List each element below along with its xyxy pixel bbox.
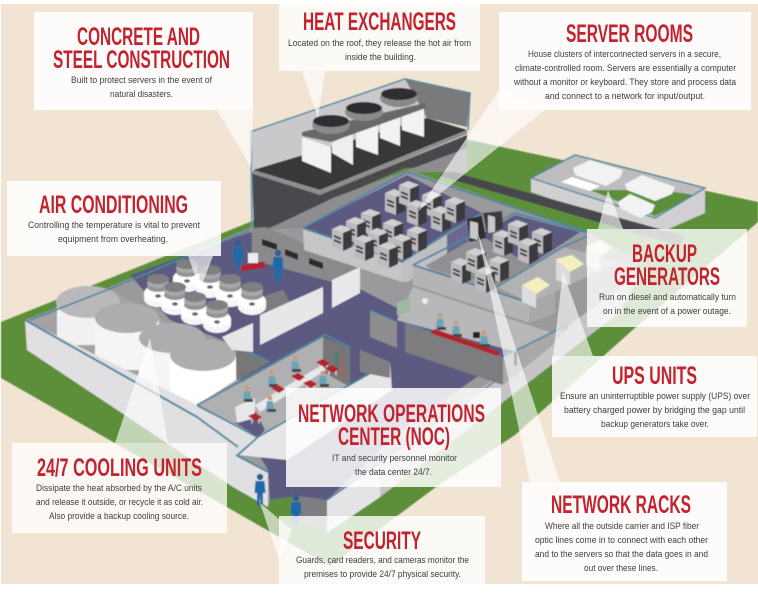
panel: network racks: and to the servers so that the data goes in and (535, 549, 708, 559)
panel: backup generators (587, 229, 747, 327)
exchanger legs (302, 137, 331, 173)
exchanger fans (312, 116, 350, 134)
panel: server rooms (499, 12, 751, 110)
main purple floor (130, 232, 515, 500)
panel: security: premises to provide 24/7 physical security. (304, 569, 461, 579)
panel: heat exchangers: inside the building. (345, 52, 416, 62)
heat exchanger tower (250, 79, 470, 230)
UPS room (497, 235, 620, 308)
panel: network racks: optic lines come in to connect with each other (535, 535, 708, 545)
panel: concrete and steel construction: natural disasters. (110, 89, 173, 99)
panel: network racks: out over these lines. (584, 563, 658, 573)
partition walls (260, 287, 323, 345)
network racks (467, 211, 503, 242)
panel: network operations center: CENTER (NOC) (338, 423, 450, 451)
central partition (370, 310, 397, 348)
exchanger stand (302, 103, 426, 142)
panel: heat exchangers (279, 4, 480, 71)
callout pointers (115, 71, 623, 560)
network operations center floor (397, 287, 567, 385)
panel: network operations center: NETWORK OPERATIONS (298, 400, 485, 428)
air conditioning units (144, 259, 266, 333)
panel: network operations center: the data center 24/7. (355, 467, 432, 477)
yard side wall (235, 345, 270, 381)
panel: heat exchangers: HEAT EXCHANGERS (303, 8, 456, 36)
panel: server rooms: climate-controlled room. Servers are essentially a computer (515, 63, 736, 73)
panel: server rooms: House clusters of interconnected servers in a secure, (528, 49, 721, 59)
panel: backup generators: Run on diesel and automatically turn (599, 292, 736, 302)
server room 2 (413, 213, 588, 323)
security guards (254, 474, 302, 527)
panel: backup generators: BACKUP (632, 240, 697, 268)
panel: security: SECURITY (343, 527, 421, 555)
cooling yard floor (30, 290, 250, 415)
NW office (220, 227, 360, 315)
panel: air conditioning: equipment from overheating. (58, 234, 168, 244)
outer left wall (25, 320, 268, 507)
panel: UPS units: Ensure an uninterruptible power supply (UPS) over (560, 391, 750, 401)
panel: concrete and steel construction: CONCRETE AND (77, 23, 200, 51)
panel: air conditioning: Controlling the temperature is vital to prevent (28, 220, 200, 230)
backup generator yard (531, 155, 705, 235)
panel: security (279, 516, 485, 584)
panel: backup generators: on in the event of a power outage. (603, 306, 731, 316)
green lawn (1, 138, 758, 566)
panel: network operations center: IT and security personnel monitor (332, 453, 457, 463)
cooling tanks (56, 286, 236, 405)
panel: concrete and steel construction (34, 12, 253, 110)
panel: 24/7 cooling units: Dissipate the heat absorbed by the A/C units (36, 483, 202, 493)
panel: concrete and steel construction: Built to protect servers in the event of (71, 75, 212, 85)
panel: 24/7 cooling units: 24/7 COOLING UNITS (37, 454, 202, 482)
panel: concrete and steel construction: STEEL CONSTRUCTION (53, 46, 230, 74)
front wall of meeting room (238, 362, 392, 460)
panel: network operations center (286, 388, 501, 487)
panel: network racks (522, 482, 727, 581)
panel: UPS units (552, 356, 757, 437)
panel: UPS units: UPS UNITS (612, 362, 697, 390)
service road (440, 170, 685, 246)
panel: network racks: Where all the outside carrier and ISP fiber (545, 521, 699, 531)
panel: air conditioning (7, 181, 221, 256)
panel: heat exchangers: Located on the roof, they release the hot air from (288, 38, 471, 48)
panel: 24/7 cooling units: Also provide a backup cooling source. (49, 511, 189, 521)
panel: 24/7 cooling units: and release it outside, or recycle it as cold air. (36, 497, 203, 507)
outer front right wall (327, 274, 640, 533)
panel: security: Guards, card readers, and cameras monitor the (296, 555, 469, 565)
panel: 24/7 cooling units (12, 443, 227, 533)
building base (25, 170, 640, 533)
panel: UPS units: backup generators take over. (601, 419, 709, 429)
meeting room (197, 335, 350, 437)
panel: UPS units: battery charged power by bridging the gap until (564, 405, 745, 415)
panel: air conditioning: AIR CONDITIONING (39, 191, 188, 219)
panel: server rooms: and connect to a network for input/output. (545, 91, 705, 101)
panel: server rooms: without a monitor or keyboard. They store and process data (513, 77, 736, 87)
server room 1 (303, 172, 590, 282)
